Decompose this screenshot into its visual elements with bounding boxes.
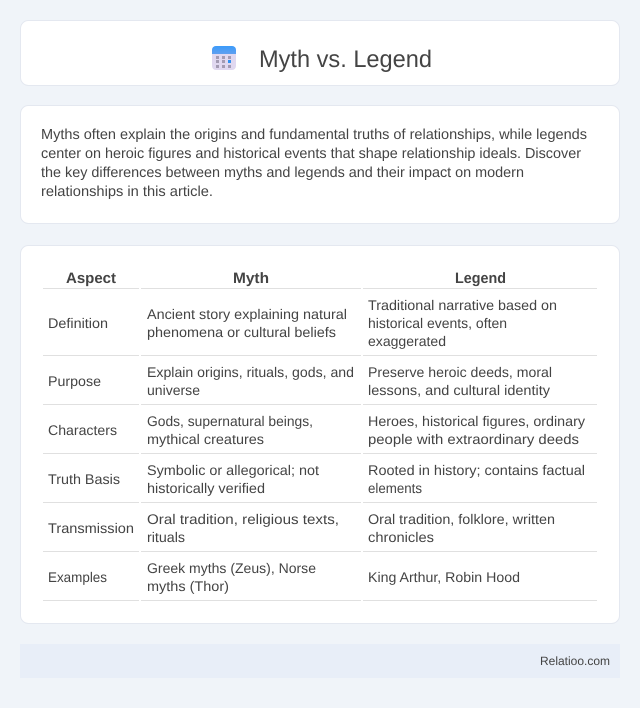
row: Transmission: rituals [147,529,185,545]
row: Definition: Ancient story explaining natural [147,306,347,322]
footer [20,644,620,678]
row: Definition: Traditional narrative based on [368,297,557,313]
row: Definition: historical events, often [368,315,507,331]
row: Examples: Examples [48,569,107,585]
row: Examples: King Arthur, Robin Hood [368,569,520,585]
row: Transmission: Oral tradition, folklore, written [368,511,555,527]
row: Examples: myths (Thor) [147,578,229,594]
row: Purpose [48,364,552,398]
row: Characters: mythical creatures [147,431,264,447]
text block: introduction: the key differences between myths and legends and their impact on modern [41,165,524,181]
row: Characters: Gods, supernatural beings, [147,413,313,429]
panel: introduction [20,106,620,224]
panel: comparison table [20,246,620,624]
text block: introduction: relationships in this article. [41,184,213,200]
row: Truth Basis: historically verified [147,480,265,496]
row: Definition: exaggerated [368,333,446,349]
row: Transmission: Oral tradition, religious texts, [147,511,339,527]
row: Truth Basis: Rooted in history; contains factual [368,462,585,478]
row: Purpose: Explain origins, rituals, gods, and [147,364,354,380]
title: Myth vs. Legend [259,46,432,73]
icon: calendar [212,46,236,70]
row: Characters [48,413,585,447]
row: Transmission: chronicles [368,529,434,545]
row: Purpose: Preserve heroic deeds, moral [368,364,552,380]
row: Transmission [48,511,555,545]
text block: introduction [41,127,587,200]
row: Characters: people with extraordinary deeds [368,431,579,447]
footer credit: Relatioo.com [540,654,610,668]
text block: introduction: Myths often explain the origins and fundamental truths of relationships, while legends [41,127,587,143]
table header: Myth [233,270,269,287]
row: Characters: Characters [48,422,117,438]
row: Purpose: universe [147,382,200,398]
row: Truth Basis: elements [368,480,422,496]
table header: Aspect [66,270,116,287]
text block: introduction: center on heroic figures and historical events that shape relationship ideals. Discover [41,146,581,162]
panel: title card [20,20,620,86]
row: Definition: phenomena or cultural beliefs [147,324,336,340]
row: Characters: Heroes, historical figures, ordinary [368,413,585,429]
row: Truth Basis: Symbolic or allegorical; not [147,462,319,478]
row: Purpose: Purpose [48,373,101,389]
row: Purpose: lessons, and cultural identity [368,382,550,398]
row: Transmission: Transmission [48,520,134,536]
table header: Legend [455,270,506,287]
row: Definition: Definition [48,315,108,331]
row: Truth Basis [48,462,585,496]
row: Examples: Greek myths (Zeus), Norse [147,560,316,576]
row: Truth Basis: Truth Basis [48,471,120,487]
row: Definition [48,297,557,349]
row: Examples [48,560,520,594]
table header [66,270,506,287]
